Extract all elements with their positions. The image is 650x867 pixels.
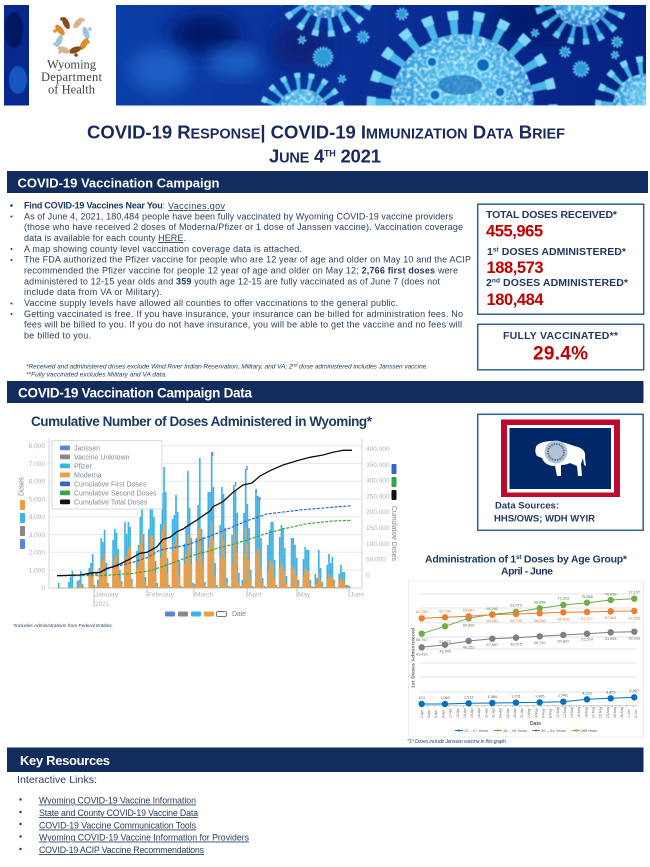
age legend: 12 – 17 Years [464,728,488,733]
date tick labels: 14-Apr [463,707,467,718]
panel: fully vaccinated [478,324,644,370]
series: 12-17 years: 1,060 [440,696,450,700]
left axis labels: 1,000 [29,568,45,574]
date tick labels: 4-May [534,708,538,718]
bullet list: campaign text: fees will be billed to you. If you do not have insurance, you will be able to get the vaccine and no fees will [24,320,462,330]
right axis labels: 350,000 [366,462,390,469]
left axis labels: 6,000 [29,479,45,486]
small virus particles [299,9,622,82]
right axis labels: 0 [366,572,370,579]
left axis title: Doses [18,476,26,496]
date tick labels: 22-May [598,706,602,718]
left axis labels: 8,000 [29,443,45,450]
age chart title [425,554,628,578]
title: JUNE 4 [269,146,324,166]
age chart title: st [516,554,522,561]
bullet list: campaign text: include data from VA or Military). [24,287,162,297]
series: 18-49 years: 55,767 [416,638,428,642]
series: 12-17 years: 1,313 [464,696,473,700]
series: 65+ years: 66,908 [557,618,569,622]
legend box [52,440,162,509]
title: 2021 [336,146,381,166]
bullet list: campaign text: be billed to you. [24,330,91,340]
bullet list: campaign text: Getting vaccinated is free. If you have insurance, your insurance can be billed for administration fees. No [24,309,463,319]
legend box: Cumulative Second Doses [74,490,157,498]
right axis title [390,464,397,562]
link list: State and County COVID-19 Vaccine Data [39,808,198,818]
legend box: Moderna [74,472,102,480]
legend box: Janssen [74,446,100,452]
bottom left virus [260,72,345,106]
footnote: doses [26,362,428,378]
icon: ring of people [53,16,92,57]
date tick labels: 28-Apr [513,707,517,718]
logo wordmark [41,58,103,96]
date tick labels: 3-Jun [634,709,638,718]
date tick labels: 8-Apr [442,709,446,718]
footnote: age chart: st [411,738,415,742]
age chart title: April - June [501,566,553,578]
series: 50-64 years: 51,524 [581,638,593,642]
age legend [455,728,597,733]
bottom legend: Date [232,611,246,618]
panel: doses totals: st [493,246,500,254]
left axis labels: 7,000 [29,461,45,468]
series: 18-49 years [416,590,640,644]
chart title: Cumulative Number of Doses Administered in Wyoming* [31,414,373,429]
month axis: March [195,592,213,598]
age chart title: Administration of 1 [425,554,516,566]
series: 50-64 years: 52,093 [628,636,640,640]
month axis: 2021 [95,601,110,608]
link list: Wyoming COVID-19 Vaccine Information for Providers [39,832,250,842]
date tick labels: 16-Apr [470,707,474,718]
section bar: Campaign Data: COVID-19 Vaccination Campaign Data [18,386,252,400]
panel: doses totals: DOSES ADMINISTERED* [500,277,629,289]
x axis title: Date [530,721,541,727]
list bullets [19,798,22,850]
series: 65+ years: 67,277 [581,617,593,621]
date tick labels: 12-Apr [456,707,460,718]
right axis labels: 250,000 [366,493,390,500]
bottom right virus [594,55,646,106]
left axis labels: 3,000 [29,532,45,539]
series: 50-64 years [416,628,640,656]
footnote: doses: *Received and administered doses exclude Wind River Indian Reservation, Military, and VA; 2 [26,364,293,370]
footnote: doses: nd [292,362,298,368]
series: 18-49 years: 77,157 [628,590,640,594]
section bar: Campaign Data [7,381,644,403]
date tick labels: 4-Apr [427,709,431,718]
month axis: May [298,592,311,598]
date tick labels: 12-May [563,706,567,718]
bullet list: campaign text: A map showing county level vaccination coverage data is attached. [24,244,302,254]
subheading: interactive links: Interactive Links: [17,774,97,786]
date tick labels: 20-Apr [484,707,488,718]
legend box: Pfizer [74,464,93,470]
line: cumulative first doses [60,506,352,576]
series: 50-64 years: 43,546 [439,650,451,654]
line: cumulative second doses [60,520,352,576]
age legend: 50 – 64 Years [541,728,566,733]
date tick labels: 18-May [584,706,588,718]
title: COVID-19 RESPONSE| COVID-19 IMMUNIZATION DATA BRIEF [87,122,565,142]
panel: fully vaccinated: FULLY VACCINATED** [503,330,619,342]
left axis labels: 2,000 [29,550,45,557]
panel: doses totals: 180,484 [486,291,544,309]
series: 18-49 years: 76,838 [605,592,617,596]
series: 65+ years: 65,799 [510,619,522,623]
date tick labels: 30-Apr [520,707,524,718]
bars: Moderna [58,522,350,588]
left axis labels: 4,000 [29,514,45,521]
bullets [10,204,13,315]
right axis labels: 300,000 [366,478,390,485]
left axis labels: 5,000 [29,496,45,504]
panel: fully vaccinated: 29.4% [533,344,588,364]
panel: doses totals: TOTAL DOSES RECEIVED* [486,209,618,221]
date tick labels: 6-Apr [434,709,438,718]
bullet list: campaign text [10,200,471,340]
date tick labels: 26-Apr [506,707,510,718]
month axis: June [350,592,364,598]
bullet list: campaign text: Vaccine supply levels have allowed all counties to offer vaccinations to the general public. [24,298,398,308]
date tick labels: 22-Apr [492,707,496,718]
panel: doses totals: 2 [486,277,492,289]
bullet list: campaign text: Vaccines.gov [168,201,226,211]
legend box: Cumulative Total Doses [74,500,148,506]
right axis labels: 150,000 [366,525,390,532]
bottom legend [165,611,246,618]
logo wordmark: Department [41,70,103,84]
link list: COVID-19 Vaccine Communication Tools [39,820,197,830]
left axis title [18,476,26,549]
panel: flag and data sources: Data Sources: [495,500,559,512]
link list [19,796,250,855]
date tick labels: 26-May [613,706,617,718]
month axis: January [95,592,119,598]
date tick labels: 2-May [527,708,531,718]
date tick labels: 2-Apr [420,709,424,718]
series: 65+ years: 64,687 [463,608,475,612]
series: 50-64 years: 47,567 [486,643,498,647]
series: 12-17 years: 1,905 [535,694,544,698]
section bar: Key Resources [7,748,644,772]
series: 65+ years: 65,281 [486,619,498,623]
right axis labels: 200,000 [366,509,390,516]
footnote: federal entities: *Includes Administrations from Federal Entities. [13,623,113,629]
footnote: age chart: *1 [407,739,412,745]
logo wordmark: of Health [48,82,96,96]
series: 50-64 years: 49,720 [534,641,546,645]
series: 65+ years: 62,755 [416,610,428,614]
series: 18-49 years: 72,319 [557,596,569,600]
age legend: ≥65 Years [581,728,597,733]
series: 65+ years: 66,236 [534,619,546,623]
bars: Janssen [212,452,260,501]
legend box: Cumulative First Doses [74,482,147,488]
bars: Pfizer [58,452,350,588]
series: 18-49 years: 65,292 [486,607,498,611]
month axis: February [148,592,175,598]
panel: flag and data sources: HHS/OWS; WDH WYIR [494,514,595,524]
bullet list: campaign text: (those who have received 2 doses of Moderna/Pfizer or 1 dose of Janssen vaccine). Vaccination coverage [24,222,463,232]
link list: Wyoming COVID-19 Vaccine Information [39,796,196,806]
header banner [4,5,646,106]
date tick labels: 16-May [577,706,581,718]
top virus [280,0,372,34]
line chart: first doses by age group [408,581,644,737]
series: 65+ years: 67,664 [605,616,617,620]
series: 12-17 years [418,689,639,707]
y axis title: 1st Doses Administered [410,628,416,688]
date tick labels: 24-May [606,706,610,718]
bullet list: campaign text: recommended the Pfizer vaccine for people 12 year of age and older on May 12; 2,766 first doses were [24,266,458,276]
series: 12-17 years: 2,441 [559,694,568,698]
title: TH [324,148,336,158]
title [87,122,565,166]
bullet list: campaign text: The FDA authorized the Pfizer vaccine for people who are 12 year of age and older on May 10 and the ACIP [24,254,471,264]
logo [29,5,116,106]
series: 50-64 years: 46,252 [463,646,475,650]
footnote: doses: dose administered includes Janssen vaccine. [297,364,428,370]
series: 65+ years: 63,796 [439,610,451,614]
date tick labels: 14-May [570,706,574,718]
date tick labels: 10-Apr [448,707,452,718]
series: 12-17 years: 1,731 [511,694,521,698]
series: 50-64 years: 50,841 [557,640,569,644]
panel: doses totals: 455,965 [486,222,543,240]
age chart title: Doses by Age Group* [521,554,628,566]
bullet list: campaign text: As of June 4, 2021, 180,484 people have been fully vaccinated by Wyoming COVID-19 vaccine providers [24,212,454,222]
section bar: Key Resources: Key Resources [20,753,110,768]
date tick labels: 1-Jun [627,709,631,718]
series: 50-64 years: 49,675 [510,642,522,646]
series: 12-17 years: 474 [419,696,425,700]
logo wordmark: Wyoming [47,58,97,72]
date tick labels: 8-May [548,708,552,718]
month axis [94,588,364,608]
section bar: COVID-19 Vaccination Campaign: COVID-19 Vaccination Campaign [18,176,220,190]
date tick labels: 20-May [592,706,596,718]
series: 65+ years [416,608,640,623]
series: 12-17 years: 4,233 [582,692,592,696]
bullet list: campaign text: data is available for each county HERE. [24,233,186,243]
panel: doses totals: nd [492,278,500,284]
panel: doses totals [478,204,644,314]
footnote: doses: **Fully vaccinated excludes Military and VA data. [26,372,167,378]
date tick labels [420,706,638,718]
date tick labels: 6-May [542,708,546,718]
section bar: COVID-19 Vaccination Campaign [7,171,648,193]
series: 18-49 years: 63,574 [510,604,522,608]
left axis labels [29,443,45,592]
series: 50-64 years: 51,956 [605,637,617,641]
series: 18-49 years: 75,866 [581,595,593,599]
series: 12-17 years: 5,907 [630,689,639,693]
left axis labels: 0 [41,585,45,592]
date tick labels: 24-Apr [498,707,502,718]
bullet list: campaign text: Find COVID-19 Vaccines Near You: [24,200,165,210]
series: 12-17 years: 1,584 [488,695,497,699]
month axis: April [248,592,262,598]
panel: doses totals: DOSES ADMINISTERED* [499,246,627,258]
series: 18-49 years: 68,858 [534,600,546,604]
right axis labels: 400,000 [366,446,390,453]
series: 18-49 years: 57,873 [439,640,451,644]
link list: COVID-19 ACIP Vaccine Recommendations [39,845,205,855]
panel: doses totals: 1 [487,246,493,258]
panel: doses totals: 188,573 [486,259,544,277]
top right virus [537,0,625,42]
series: 65+ years: 67,955 [628,616,640,620]
right axis labels [366,446,390,579]
line: cumulative total doses [57,450,352,576]
icon: Wyoming flag [501,420,620,497]
footnote: age chart: Doses include Janssen vaccine in this graph. [414,739,507,745]
right axis labels: 50,000 [366,557,386,564]
right axis title: Cumulative Doses [390,506,397,562]
left banner strip [4,5,29,106]
combo chart: doses administered [18,438,397,618]
date tick labels: 10-May [556,706,560,718]
legend box: Vaccine Unknown [74,454,130,462]
grid lines [49,446,362,570]
panel: flag and data sources [478,414,643,530]
main virus [366,10,558,106]
date tick labels: 18-Apr [477,707,481,718]
series: 12-17 years: 4,823 [606,690,615,694]
bullet list: campaign text: administered to 12-15 year olds and 359 youth age 12-15 are fully vaccinated as of June 7 (does not [24,276,440,286]
series: 50-64 years: 41,419 [416,652,428,656]
age legend: 18 – 49 Years [503,728,527,733]
series: 18-49 years: 60,890 [463,624,475,628]
date tick labels: 28-May [620,706,624,718]
right axis labels: 100,000 [366,541,390,548]
virus illustration [119,5,646,106]
